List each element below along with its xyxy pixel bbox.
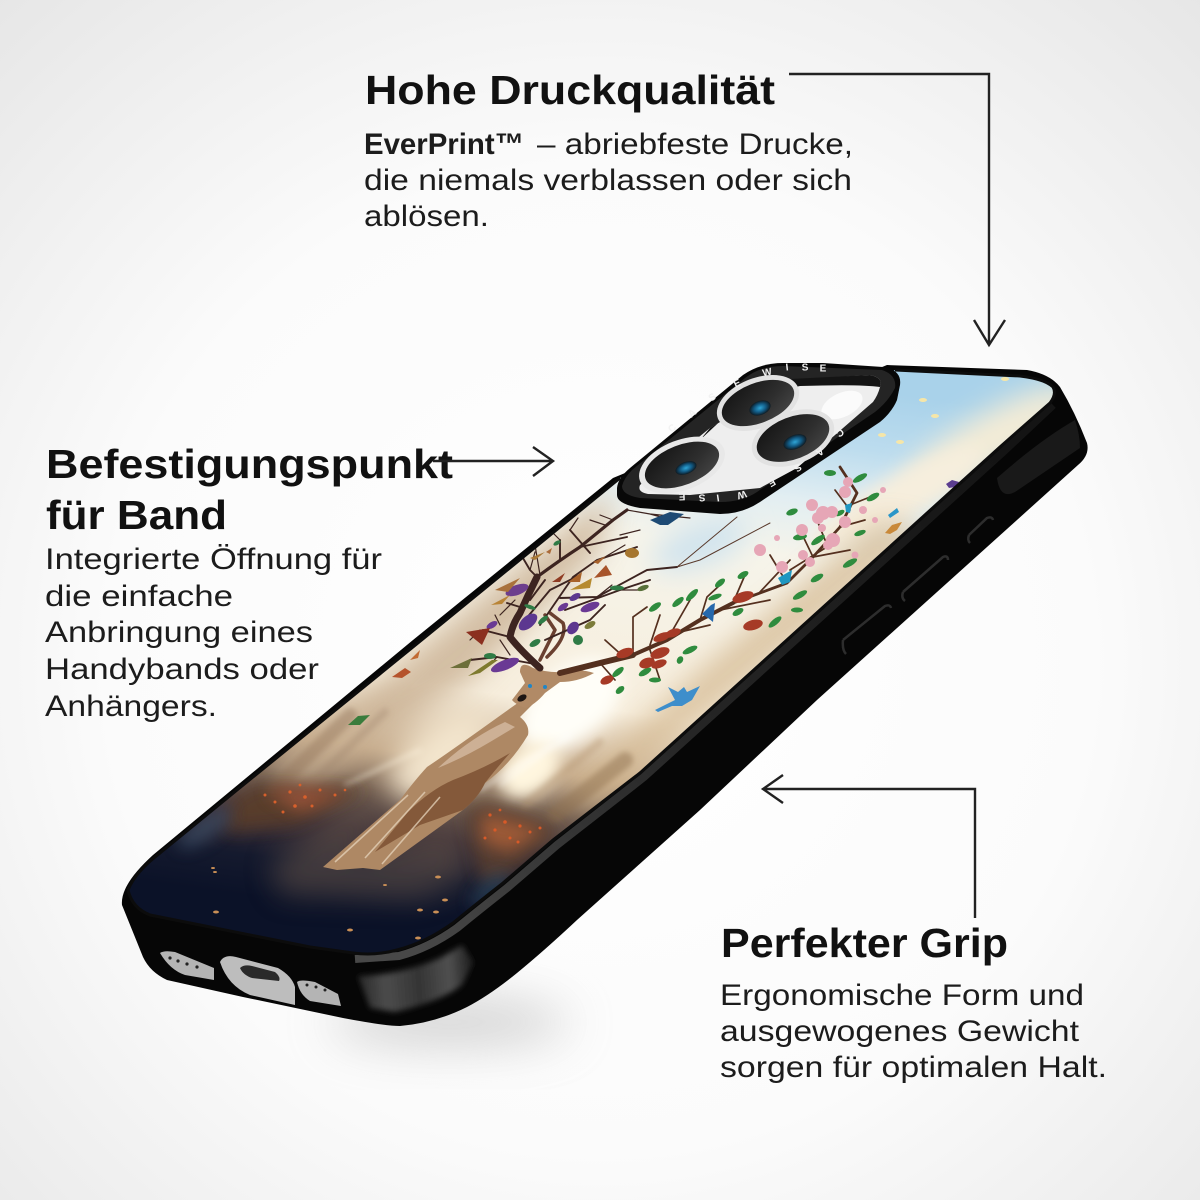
right antler xyxy=(560,467,875,680)
left antler leaves and grapes xyxy=(450,539,649,676)
phone case xyxy=(100,340,1100,1026)
body text: – abriebfeste Drucke, xyxy=(537,128,853,161)
ground path xyxy=(270,805,470,900)
autumn leaf mound right xyxy=(465,803,560,884)
case body xyxy=(122,365,1088,1026)
deer xyxy=(323,665,594,870)
right antler green leaves xyxy=(611,470,881,696)
callout: Perfekter Grip xyxy=(720,920,1107,1084)
small blue bird on branch xyxy=(650,512,684,525)
forest trunks xyxy=(272,712,625,815)
charging port xyxy=(220,956,295,1005)
left antler xyxy=(470,510,770,668)
butterflies xyxy=(778,480,959,585)
camera window xyxy=(639,375,881,495)
callout: Befestigungspunkt xyxy=(45,441,453,723)
right speaker grille xyxy=(297,980,341,1006)
perched blue bird xyxy=(702,603,715,622)
printed artwork xyxy=(130,370,1053,952)
right lens xyxy=(744,398,842,478)
body text: Anhängers. xyxy=(45,690,217,723)
screen rim xyxy=(128,370,1054,954)
side button: mute xyxy=(968,517,993,543)
body text: ausgewogenes Gewicht xyxy=(720,1015,1080,1048)
CASEWISE lettering bottom: A xyxy=(813,445,826,458)
arrow: strap point xyxy=(433,447,553,476)
side button: volume down xyxy=(843,605,891,654)
CASEWISE lettering top: W xyxy=(761,367,774,379)
CASEWISE lettering top: E xyxy=(732,377,743,390)
CASEWISE lettering top: C xyxy=(666,422,679,435)
phone drop shadow xyxy=(330,998,570,1046)
CASEWISE lettering bottom: W xyxy=(735,487,748,501)
sky light dots xyxy=(878,377,1009,444)
bottom corner gloss xyxy=(358,945,474,1012)
heading: Hohe Druckqualität xyxy=(365,67,775,113)
heading: Perfekter Grip xyxy=(721,920,1008,966)
left speaker grille xyxy=(160,951,214,980)
callout: Hohe Druckqualität xyxy=(364,67,853,233)
red apples xyxy=(599,589,764,687)
camera module xyxy=(617,362,900,514)
CASEWISE lettering bottom: I xyxy=(716,491,720,503)
grip strap recess xyxy=(997,420,1080,494)
clouds and haze xyxy=(270,367,1090,817)
autumn leaf mound left xyxy=(225,784,365,832)
CASEWISE lettering bottom: E xyxy=(678,490,685,502)
heading: Befestigungspunkt xyxy=(46,441,453,487)
body text: Integrierte Öffnung für xyxy=(45,543,382,576)
CASEWISE lettering top xyxy=(666,362,827,435)
body text xyxy=(720,979,1107,1084)
body text xyxy=(364,128,853,233)
CASEWISE lettering bottom: C xyxy=(833,426,846,439)
side button: volume up xyxy=(902,556,948,601)
scattered ground leaves xyxy=(211,867,448,940)
rim highlight xyxy=(355,405,1053,959)
blue shadow patches xyxy=(176,805,508,906)
CASEWISE lettering top: E xyxy=(820,364,827,374)
deer body and legs xyxy=(323,704,533,870)
CASEWISE lettering bottom xyxy=(678,426,846,503)
top lens xyxy=(709,364,807,442)
CASEWISE lettering top: I xyxy=(785,362,789,374)
body text: EverPrint™ xyxy=(364,128,524,161)
falling leaves xyxy=(348,650,420,725)
body text: die niemals verblassen oder sich xyxy=(364,164,852,197)
body text: sorgen für optimalen Halt. xyxy=(720,1051,1107,1084)
body text: ablösen. xyxy=(364,200,489,233)
body text: Anbringung eines xyxy=(45,616,313,649)
body text: die einfache xyxy=(45,580,233,613)
cherry blossoms xyxy=(754,477,886,573)
CASEWISE lettering top: S xyxy=(801,362,809,374)
body text xyxy=(45,543,382,723)
heading xyxy=(46,441,453,538)
CASEWISE lettering bottom: S xyxy=(791,461,803,474)
arrow: grip xyxy=(763,775,975,918)
left lens xyxy=(631,426,733,504)
body text: Ergonomische Form und xyxy=(720,979,1084,1012)
CASEWISE lettering bottom: S xyxy=(698,491,706,503)
deer head xyxy=(512,665,594,708)
CASEWISE lettering top: A xyxy=(686,407,699,420)
CASEWISE lettering top: S xyxy=(707,391,719,404)
flying blue bird xyxy=(655,686,700,712)
camera bumper xyxy=(617,363,900,514)
body text: Handybands oder xyxy=(45,653,319,686)
CASEWISE lettering bottom: E xyxy=(766,476,777,489)
arrow: print quality xyxy=(789,74,1005,345)
heading: für Band xyxy=(46,492,227,538)
